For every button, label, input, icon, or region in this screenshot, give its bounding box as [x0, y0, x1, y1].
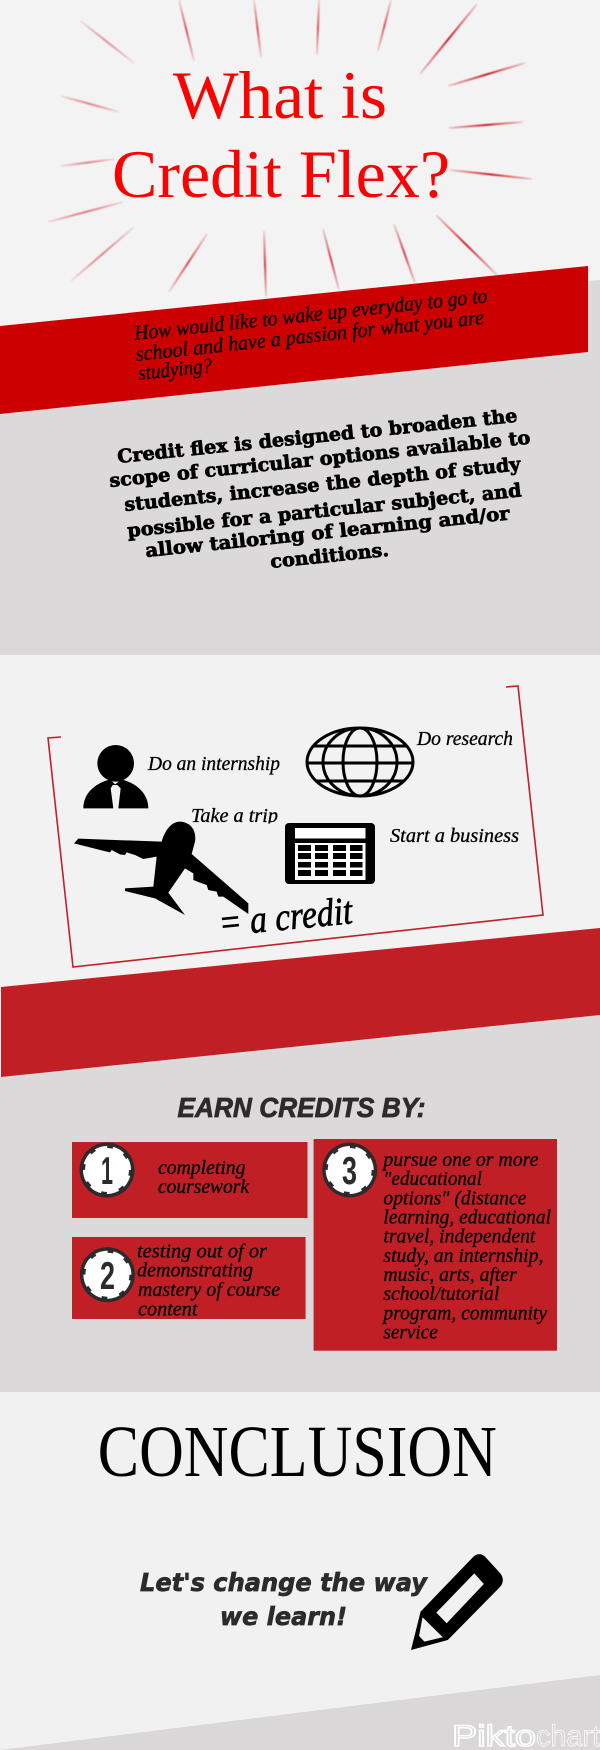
definition text: allow tailoring of learning and/or	[144, 503, 511, 562]
card 3: program, community	[381, 1302, 547, 1324]
card 3: learning, educational	[383, 1206, 551, 1228]
definition text: students, increase the depth of study	[123, 454, 523, 516]
panel: conclusion background	[0, 1392, 600, 1750]
closing message	[140, 1568, 429, 1631]
question text: How would like to wake up everyday to go to	[132, 283, 489, 345]
red question band	[0, 266, 588, 414]
definition text	[108, 406, 531, 573]
question text: school and have a passion for what you are	[134, 305, 485, 366]
card 2: mastery of course	[138, 1279, 280, 1301]
icon: pencil	[411, 1554, 503, 1650]
question text: studying?	[137, 353, 214, 385]
card 3: pursue one or more	[381, 1149, 539, 1171]
panel: earn credits background	[0, 1015, 600, 1392]
card 3: "educational	[383, 1168, 482, 1190]
label: trip: Take a trip	[191, 805, 278, 827]
closing message: we learn!	[220, 1602, 347, 1631]
card 3: study, an internship,	[383, 1245, 543, 1267]
heading: conclusion: CONCLUSION	[98, 1411, 497, 1492]
card 2: content	[138, 1299, 198, 1321]
label: internship: Do an internship	[147, 753, 280, 775]
definition text: Credit flex is designed to broaden the	[116, 406, 518, 468]
card 1: completing	[158, 1157, 246, 1179]
card 2: testing out of or	[137, 1241, 267, 1263]
card 3	[314, 1139, 557, 1351]
question text	[132, 283, 489, 385]
icon: globe	[305, 728, 415, 796]
label: research: Do research	[416, 728, 513, 750]
panel: definition background	[0, 280, 600, 655]
title	[112, 57, 450, 212]
card 1: 1	[101, 1150, 113, 1193]
label: business: Start a business	[390, 825, 519, 847]
card 3: 3	[342, 1150, 357, 1193]
icon: person	[83, 745, 148, 808]
equals a credit text: = a credit	[217, 889, 355, 945]
icon: airplane	[74, 822, 248, 915]
card 3: options" (distance	[383, 1187, 527, 1209]
sunburst rays	[48, 0, 532, 297]
card 3: school/tutorial	[383, 1283, 500, 1305]
closing message: Let's change the way	[140, 1568, 429, 1597]
card 2: 2	[100, 1255, 115, 1298]
watermark: Piktochart	[452, 1720, 600, 1750]
definition text: possible for a particular subject, and	[126, 480, 522, 542]
red divider band	[1, 928, 600, 1077]
card 3: music, arts, after	[383, 1264, 517, 1286]
card 1	[72, 1142, 308, 1218]
card 3: travel, independent	[383, 1226, 536, 1248]
card 2: demonstrating	[137, 1260, 253, 1282]
title: Credit Flex?	[112, 136, 450, 212]
red bracket frame	[48, 686, 543, 967]
card 2	[72, 1237, 306, 1321]
definition text: conditions.	[269, 540, 390, 573]
panel: top background	[0, 0, 600, 660]
panel: activities background	[0, 655, 600, 995]
title: What is	[173, 57, 387, 133]
corner wedge	[0, 1675, 600, 1750]
icon: calendar table	[285, 823, 375, 884]
definition text: scope of curricular options available to	[108, 428, 531, 492]
card 1: coursework	[158, 1176, 250, 1198]
card 3: service	[383, 1322, 438, 1344]
heading: earn credits: EARN CREDITS BY:	[178, 1092, 426, 1123]
